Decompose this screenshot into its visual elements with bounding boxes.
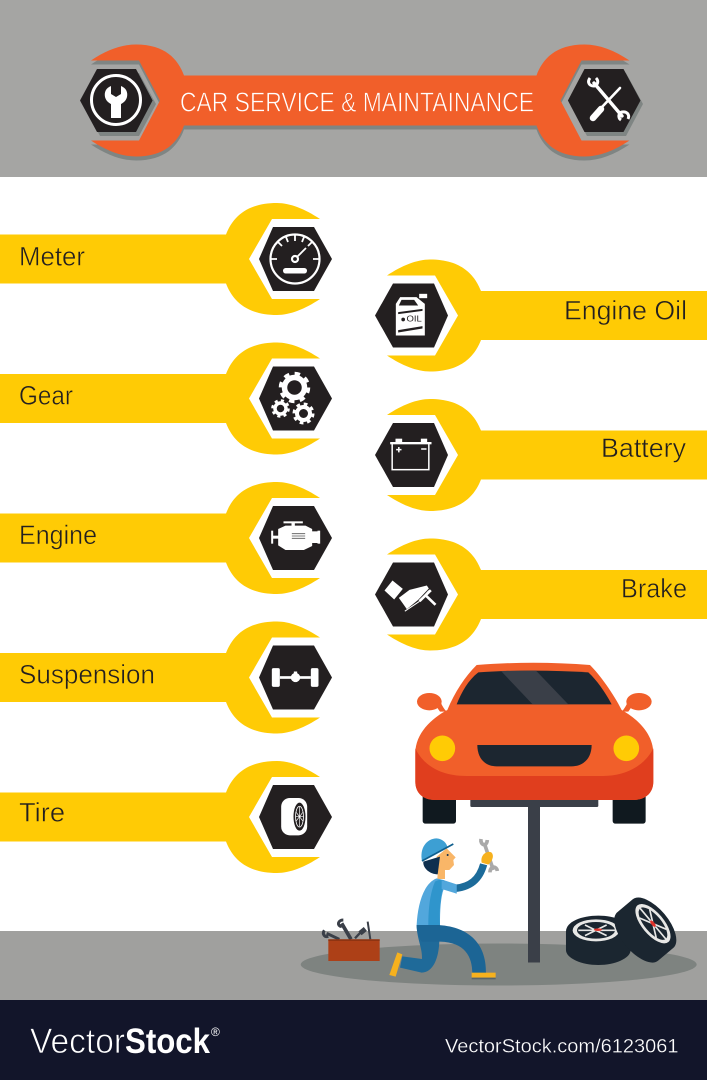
rear leg xyxy=(400,925,440,973)
windshield highlight xyxy=(501,671,568,704)
stacked tires xyxy=(566,890,685,970)
car body xyxy=(415,663,653,800)
footer logo: Stock xyxy=(125,1022,210,1061)
lift plate xyxy=(470,798,598,807)
icon: speedometer xyxy=(270,234,320,284)
toolbox xyxy=(328,939,380,961)
wrench: Brake xyxy=(375,538,707,650)
icon: brake pedal xyxy=(385,581,435,611)
footer logo: Vector xyxy=(30,1022,125,1061)
icon: tire xyxy=(281,798,307,835)
grille xyxy=(477,745,592,766)
left tire xyxy=(566,916,631,965)
shoes xyxy=(389,952,402,977)
label: Engine Oil: Engine Oil xyxy=(564,296,687,326)
icon: engine xyxy=(271,521,320,550)
windshield xyxy=(457,671,612,704)
cap xyxy=(421,838,447,861)
eye xyxy=(447,854,449,856)
icon: header right crossed tools xyxy=(568,69,643,136)
footer band xyxy=(0,1000,707,1080)
wrench: Meter xyxy=(0,203,332,315)
headlights xyxy=(429,735,639,761)
torso xyxy=(417,878,457,925)
raised wrench xyxy=(481,839,497,872)
wrench: Engine Oil xyxy=(375,260,707,372)
icon: oil can: OIL xyxy=(407,314,422,323)
mechanic xyxy=(389,838,497,979)
wrench: Tire xyxy=(0,761,332,873)
label: Engine: Engine xyxy=(19,520,97,550)
car tires xyxy=(423,790,646,824)
title: CAR SERVICE & MAINTAINANCE xyxy=(180,86,534,118)
icon: battery xyxy=(390,439,431,470)
label: Suspension: Suspension xyxy=(19,660,155,690)
icon: header left wrench in ring xyxy=(80,69,156,136)
label: Meter: Meter xyxy=(19,242,85,272)
right tire xyxy=(606,890,685,970)
icon: oil can xyxy=(396,294,427,335)
arm xyxy=(456,864,484,888)
header wrench banner xyxy=(91,44,630,160)
label: Battery: Battery xyxy=(601,433,686,463)
footer logo: ® xyxy=(211,1025,220,1039)
floor band xyxy=(0,931,707,1000)
wrench: Suspension xyxy=(0,622,332,734)
lift post xyxy=(528,807,540,962)
wrench: Battery xyxy=(375,399,707,511)
wrench: Engine xyxy=(0,482,332,594)
hair xyxy=(423,857,440,874)
car on lift xyxy=(415,663,653,824)
neck and face xyxy=(437,848,456,879)
car mirrors xyxy=(417,693,652,712)
icon: axle xyxy=(272,668,318,687)
footer logo xyxy=(30,1022,220,1061)
label: Brake: Brake xyxy=(621,574,687,604)
toolbox and tools xyxy=(323,920,380,961)
icon: gears xyxy=(272,374,313,423)
tools in box xyxy=(323,920,370,939)
label: Tire: Tire xyxy=(19,798,65,828)
front leg xyxy=(417,925,486,973)
glove xyxy=(481,852,493,865)
header band xyxy=(0,0,707,177)
wrench: Gear xyxy=(0,342,332,454)
label: Gear: Gear xyxy=(19,380,73,410)
footer url: VectorStock.com/6123061 xyxy=(445,1036,678,1058)
floor shadow ellipse xyxy=(301,944,697,986)
lift post lower xyxy=(528,930,540,962)
car lower body xyxy=(415,748,653,800)
